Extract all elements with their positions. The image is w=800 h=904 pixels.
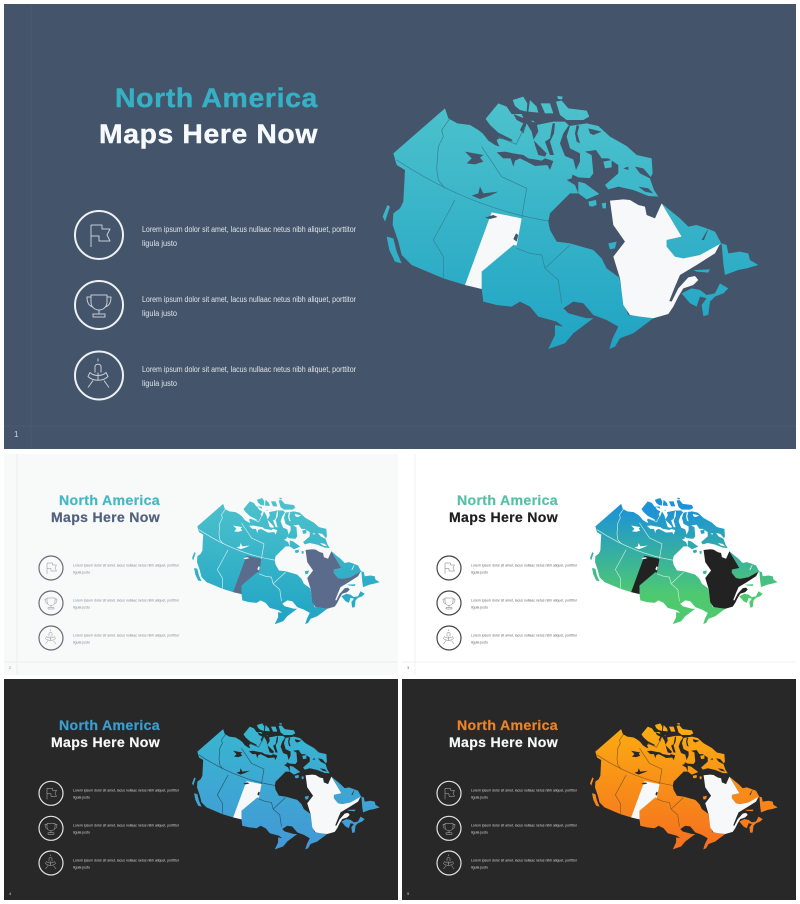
slide 5 text list: Lorem ipsum dolor sit amet, lacus nullaac netus nibh aliquet, porttitor — [471, 822, 578, 828]
slide 1 item text 3 — [142, 365, 356, 388]
slide 5 background — [402, 679, 796, 900]
slide 4 page number: 4 — [9, 891, 12, 896]
slide 3 heading: Maps Here Now — [449, 510, 558, 525]
slide 1 background — [4, 4, 796, 449]
slide 2 guide lines — [4, 454, 398, 675]
slide 4 text list: Lorem ipsum dolor sit amet, lacus nullaac netus nibh aliquet, porttitor — [73, 788, 180, 792]
panel: white slide — [402, 454, 796, 675]
slide 5 text list: ligula justo — [471, 794, 489, 800]
slide 4 text list: ligula justo — [73, 864, 91, 870]
slide 1 heading: Maps Here Now — [99, 119, 318, 149]
slide 2 heading: Maps Here Now — [51, 510, 160, 525]
panel: light slide — [4, 454, 398, 675]
slide 4 compass icon — [39, 851, 63, 875]
slide 1 item text 1 — [142, 225, 356, 248]
slide 5 heading: North America — [457, 718, 558, 733]
slide 4 heading — [51, 718, 160, 750]
slide 3 text list — [471, 562, 578, 644]
slide 2 text list: ligula justo — [73, 570, 91, 574]
slide 2 text list: Lorem ipsum dolor sit amet, lacus nullaac netus nibh aliquet, porttitor — [73, 598, 180, 602]
slide 2 heading: North America — [59, 493, 160, 508]
slide 5 heading — [449, 718, 558, 750]
slide 3 text list: Lorem ipsum dolor sit amet, lacus nullaac netus nibh aliquet, porttitor — [471, 562, 578, 568]
slide 1 page number: 1 — [14, 430, 19, 439]
slide 4 icon list — [39, 781, 63, 875]
slide 4 flag icon — [39, 781, 63, 805]
slide 3 compass icon — [437, 626, 461, 650]
slide 5 text list: Lorem ipsum dolor sit amet, lacus nullaac netus nibh aliquet, porttitor — [471, 858, 578, 862]
panel: large navy slide — [4, 4, 796, 449]
slide 4 trophy icon — [39, 816, 63, 840]
slide 5 heading: Maps Here Now — [449, 735, 558, 750]
slide 2 icon list — [39, 556, 63, 650]
slide 3 text list: ligula justo — [471, 570, 489, 574]
slide 2 heading — [51, 493, 160, 525]
slide 1 heading — [99, 83, 318, 149]
slide 5 map of Canada — [590, 723, 778, 849]
slide 1 item text 1: Lorem ipsum dolor sit amet, lacus nullaac netus nibh aliquet, porttitor — [142, 225, 356, 234]
slide 2 text list — [73, 562, 180, 644]
slide 5 text list — [471, 788, 578, 870]
slide 2 map of Canada — [192, 498, 380, 624]
slide 3 trophy icon — [437, 591, 461, 615]
slide 3 text list: ligula justo — [471, 604, 489, 610]
slide 3 page number: 3 — [407, 665, 410, 670]
slide 5 flag icon — [437, 781, 461, 805]
slide 3 guide lines — [402, 454, 796, 675]
slide 3 flag icon — [437, 556, 461, 580]
slide 3 background — [402, 454, 796, 675]
slide 1 item text 2: ligula justo — [142, 309, 177, 318]
slide 3 icon list — [437, 556, 461, 650]
slide 2 compass icon — [39, 626, 63, 650]
slide 5 icon list — [437, 781, 461, 875]
slide 5 compass icon — [437, 851, 461, 875]
slide 4 heading: North America — [59, 718, 160, 733]
slide 1 item text 1: ligula justo — [142, 239, 177, 248]
slide 4 map of Canada — [192, 723, 380, 849]
slide 5 page number: 5 — [407, 891, 410, 896]
slide 1 item: flag icon — [75, 211, 123, 259]
panel: dark blue-accent slide — [4, 679, 398, 900]
slide 1 item: compass icon — [75, 352, 123, 400]
slide 5 text list: Lorem ipsum dolor sit amet, lacus nullaac netus nibh aliquet, porttitor — [471, 788, 578, 792]
slide 3 heading: North America — [457, 493, 558, 508]
slide 3 heading — [449, 493, 558, 525]
slide 1 item text 2 — [142, 295, 356, 318]
slide 4 background — [4, 679, 398, 900]
slide 3 text list: Lorem ipsum dolor sit amet, lacus nullaac netus nibh aliquet, porttitor — [471, 598, 578, 602]
slide 3 text list: Lorem ipsum dolor sit amet, lacus nullaac netus nibh aliquet, porttitor — [471, 632, 578, 638]
slide 2 text list: ligula justo — [73, 604, 91, 610]
slide 4 text list: ligula justo — [73, 830, 91, 834]
slide 1 guide lines — [4, 4, 796, 449]
slide 2 background — [4, 454, 398, 675]
slide 1 item text 3: Lorem ipsum dolor sit amet, lacus nullaac netus nibh aliquet, porttitor — [142, 365, 356, 374]
slide 4 text list: Lorem ipsum dolor sit amet, lacus nullaac netus nibh aliquet, porttitor — [73, 858, 180, 862]
slide 2 text list: Lorem ipsum dolor sit amet, lacus nullaac netus nibh aliquet, porttitor — [73, 562, 180, 568]
slide 2 text list: ligula justo — [73, 640, 91, 644]
panel: dark orange-accent slide — [402, 679, 796, 900]
slide 3 map of Canada — [590, 498, 778, 624]
slide 1 item text 3: ligula justo — [142, 379, 177, 388]
slide 4 text list — [73, 788, 180, 870]
slide 2 trophy icon — [39, 591, 63, 615]
slide 1 item: trophy icon — [75, 281, 123, 329]
slide 5 trophy icon — [437, 816, 461, 840]
slide 1 map of Canada — [383, 96, 758, 349]
slide 4 heading: Maps Here Now — [51, 735, 160, 750]
slide 3 text list: ligula justo — [471, 640, 489, 644]
slide 5 text list: ligula justo — [471, 864, 489, 870]
slide 1 heading: North America — [115, 83, 318, 113]
slide 1 item text 2: Lorem ipsum dolor sit amet, lacus nullaac netus nibh aliquet, porttitor — [142, 295, 356, 304]
slide 2 page number: 2 — [9, 665, 12, 670]
slide 2 text list: Lorem ipsum dolor sit amet, lacus nullaac netus nibh aliquet, porttitor — [73, 632, 180, 638]
slide 4 text list: Lorem ipsum dolor sit amet, lacus nullaac netus nibh aliquet, porttitor — [73, 822, 180, 828]
slide 2 flag icon — [39, 556, 63, 580]
slide 4 text list: ligula justo — [73, 794, 91, 800]
slide 5 text list: ligula justo — [471, 830, 489, 834]
